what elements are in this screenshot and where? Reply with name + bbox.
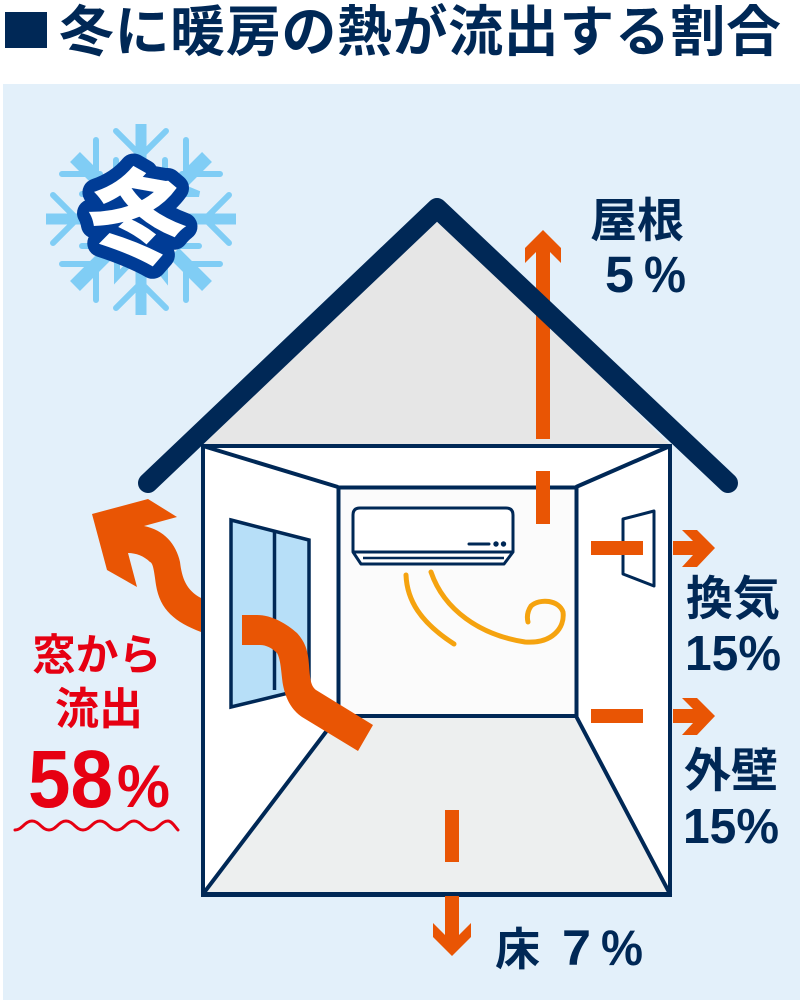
- ventilation opening: [623, 511, 654, 586]
- label: roof 5%: 屋根: [590, 194, 684, 247]
- label: floor 7%: 床: [495, 924, 540, 975]
- air conditioner: [353, 508, 513, 564]
- label: window outflow 58%: 58: [28, 734, 113, 825]
- arrow: ceiling segment: [536, 471, 550, 524]
- icon: snowflake with winter badge: 冬: [80, 156, 195, 281]
- label: ventilation 15%: [685, 572, 781, 681]
- arrow: exterior wall heat loss: [591, 698, 715, 735]
- arrow: roof heat loss: [525, 230, 561, 439]
- panel: room: [203, 446, 670, 895]
- label: roof 5%: %: [644, 246, 686, 303]
- back wall: [338, 488, 576, 716]
- label: floor 7%: %: [601, 920, 643, 976]
- arrow: ventilation heat loss: [591, 530, 715, 567]
- label: roof 5%: 5: [605, 246, 634, 303]
- arrow: window heat loss: [92, 499, 373, 751]
- label: floor 7%: 7: [562, 920, 591, 976]
- warm air flow: [406, 572, 563, 644]
- label: window outflow 58%: 窓から: [32, 632, 162, 680]
- title: 冬に暖房の熱が流出する割合: [59, 1, 781, 63]
- house attic: [203, 215, 670, 445]
- arrow: floor heat loss: [433, 810, 471, 956]
- label: window outflow 58%: %: [117, 753, 170, 820]
- window: [231, 520, 309, 707]
- icon: snowflake with winter badge: [46, 124, 236, 315]
- house roof: [148, 208, 728, 483]
- label: window outflow 58%: [15, 632, 178, 830]
- floor: [203, 716, 670, 894]
- label: exterior wall 15%: [683, 744, 779, 854]
- label: roof 5%: [590, 194, 686, 303]
- label: ventilation 15%: 15%: [685, 627, 781, 681]
- icon: snowflake with winter badge: 冬: [80, 156, 195, 281]
- label: floor 7%: [495, 920, 643, 976]
- label: ventilation 15%: 換気: [686, 572, 780, 625]
- label: exterior wall 15%: 15%: [683, 800, 779, 854]
- label: window outflow 58%: 流出: [55, 685, 143, 734]
- label: exterior wall 15%: 外壁: [684, 744, 778, 797]
